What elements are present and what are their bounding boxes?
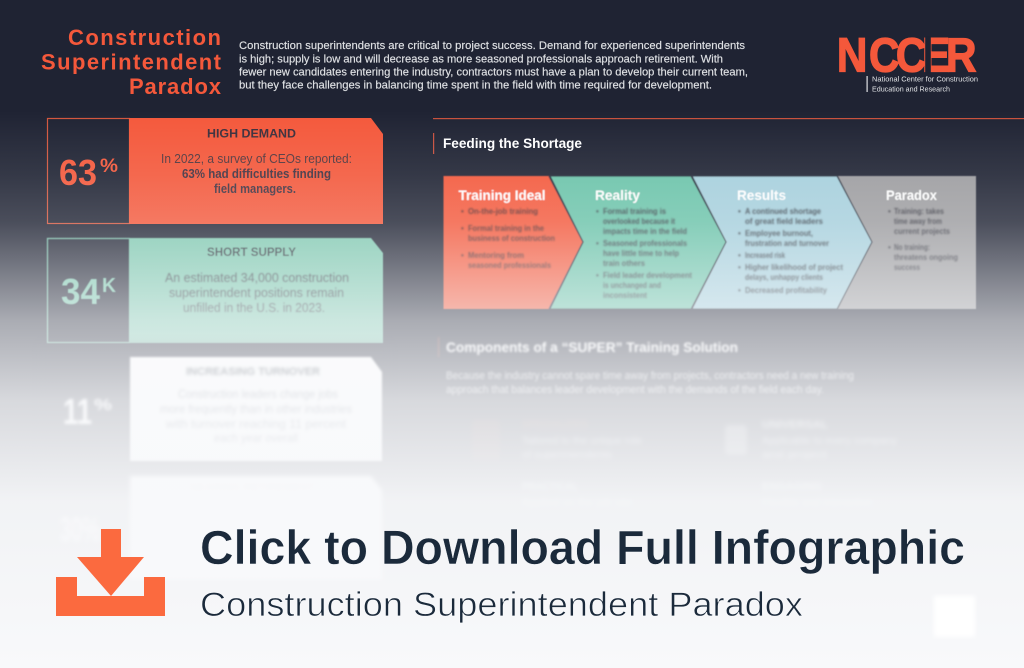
title: Superintendent: [41, 50, 222, 74]
intro text: fewer new candidates entering the industry, contractors must have a plan to develop their current team,: [239, 66, 748, 78]
solution items (faded): Tailored to the unique role: [522, 436, 642, 447]
title: [41, 25, 222, 99]
panel: retirement: NEARING RETIREMENT: [190, 482, 315, 494]
panel: high demand: 63% had difficulties finding: [182, 167, 331, 181]
section: components of a SUPER training solution: [438, 337, 854, 396]
faded footer square: [934, 596, 975, 637]
call to action subtitle: Construction Superintendent Paradox: [200, 586, 803, 624]
chevron: training ideal: Training Ideal: [458, 187, 546, 203]
chevron: results: Decreased profitability: [745, 286, 828, 295]
chevron: reality: [550, 176, 726, 309]
panel: retirement: [60, 476, 382, 580]
panel: increasing turnover: more frequently than in other industries: [160, 402, 352, 416]
panel: high demand: HIGH DEMAND: [207, 126, 296, 140]
solution items (faded): of superintendents: [522, 450, 612, 461]
chevron: training ideal: On-the-job training: [468, 207, 538, 216]
intro text: [239, 40, 748, 92]
chevron: results: Results: [737, 187, 786, 203]
chevron: paradox: time away from: [894, 217, 942, 226]
chevron: training ideal: Mentoring from: [468, 251, 524, 260]
chevron: training ideal: [444, 176, 583, 309]
chevron: training ideal: •: [461, 224, 464, 233]
solution items (faded): Flexible and interactive: [762, 498, 872, 509]
logo: NCCER: Education and Research: [872, 84, 950, 94]
solution items (faded): SPECIALIZED: [522, 419, 588, 431]
chevron: paradox: No training:: [894, 243, 930, 252]
panel: increasing turnover: each year overall: [214, 431, 298, 445]
chevron: reality: Formal training is: [603, 207, 667, 216]
panel: short supply: unfilled in the U.S. in 2023.: [183, 301, 325, 315]
chevron flow chart: [444, 176, 976, 309]
chevron: reality: overlooked because it: [603, 217, 675, 226]
chevron: paradox: [838, 176, 976, 309]
logo: NCCER: National Center for Construction: [872, 74, 978, 84]
chevron: paradox: •: [888, 207, 891, 216]
panel: increasing turnover: Construction leaders change jobs: [178, 387, 338, 401]
chevron: reality: Field leader development: [603, 271, 692, 280]
panel: increasing turnover: INCREASING TURNOVER: [186, 366, 320, 378]
title: Construction: [68, 25, 221, 50]
panel: short supply: superintendent positions remain: [169, 286, 344, 300]
chevron: results: delays, unhappy clients: [745, 273, 823, 282]
chevron: paradox: Training: takes: [894, 207, 944, 216]
panel: increasing turnover: %: [94, 397, 112, 414]
panel: increasing turnover: [63, 357, 382, 461]
chevron: training ideal: •: [461, 251, 464, 260]
chevron: training ideal: Formal training in the: [468, 224, 545, 233]
chevron: reality: is unchanged and: [603, 281, 661, 290]
panel: increasing turnover: with turnover reaching 11 percent: [165, 417, 347, 431]
chevron: reality: inconsistent: [603, 291, 647, 300]
panel: high demand: %: [100, 156, 118, 177]
panel: short supply: 34: [61, 271, 100, 312]
chevron: results: A continued shortage: [745, 207, 822, 216]
chevron: results: of great field leaders: [745, 217, 824, 226]
chevron: reality: •: [596, 239, 599, 248]
chevron: reality: have little time to help: [603, 249, 679, 258]
solution items (faded): ENGAGING: [762, 481, 822, 493]
chevron: reality: impacts time in the field: [603, 227, 687, 236]
chevron: reality: train others: [603, 259, 646, 268]
panel: short supply: [48, 238, 383, 343]
solution items (faded): UNIVERSAL: [762, 419, 828, 431]
logo: NCCER: NCCER: [837, 28, 977, 82]
call to action heading: Click to Download Full Infographic: [200, 522, 965, 575]
intro text: Construction superintendents are critical to project success. Demand for experienced superintendents: [239, 40, 746, 52]
chevron: reality: Seasoned professionals: [603, 239, 688, 248]
intro text: but they face challenges in balancing time spent in the field with time required for development.: [239, 80, 712, 92]
section: components of a SUPER training solution: approach that balances leader development with the demands of the field each day.: [446, 384, 824, 396]
intro text: is high; supply is low and will decrease as more seasoned professionals approach retirement. With: [239, 54, 723, 66]
panel: increasing turnover: 11: [63, 391, 92, 432]
chevron: results: •: [738, 263, 741, 272]
chevron: reality: •: [596, 271, 599, 280]
solution items (faded): [472, 419, 897, 509]
chevron: results: •: [738, 229, 741, 238]
solution items (faded): Applied on the job site: [522, 498, 632, 509]
chevron: results: •: [738, 251, 741, 260]
heading: feeding the shortage: Feeding the Shortage: [443, 135, 582, 151]
chevron: results: •: [738, 207, 741, 216]
chevron: training ideal: business of construction: [468, 234, 555, 243]
icon: download arrow: [56, 529, 165, 616]
chevron: paradox: success: [894, 263, 920, 272]
panel: high demand: [48, 118, 383, 224]
chevron: reality: •: [596, 207, 599, 216]
chevron: results: •: [738, 286, 741, 295]
chevron: paradox: current projects: [894, 227, 951, 236]
divider line: right column: [433, 118, 1024, 119]
soft shadow behind lower panels: [42, 344, 388, 472]
chevron: results: [692, 176, 872, 309]
solution items (faded): Applicable to every company: [762, 436, 897, 447]
chevron: reality: Reality: [595, 187, 640, 203]
panel: retirement: 30%: [60, 511, 100, 549]
chevron: paradox: Paradox: [886, 187, 937, 203]
chevron: results: Higher likelihood of project: [745, 263, 843, 272]
solution items (faded): and project: [762, 450, 827, 461]
chevron: results: Increased risk: [745, 251, 785, 260]
chevron: results: frustration and turnover: [745, 239, 829, 248]
panel: high demand: field managers.: [214, 182, 296, 196]
solution items (faded): PRACTICAL: [522, 481, 578, 493]
section: components of a SUPER training solution: Components of a “SUPER” Training Solution: [446, 340, 738, 355]
chevron: paradox: threatens ongoing: [894, 253, 958, 262]
chevron: training ideal: seasoned professionals: [468, 261, 551, 270]
section: components of a SUPER training solution: Because the industry cannot spare time away from projects, contractors need a new training: [446, 370, 854, 382]
panel: short supply: An estimated 34,000 construction: [165, 271, 349, 285]
chevron: paradox: •: [888, 243, 891, 252]
title: Paradox: [129, 74, 222, 99]
panel: high demand: In 2022, a survey of CEOs reported:: [161, 152, 352, 166]
panel: high demand: 63: [59, 152, 97, 193]
panel: short supply: SHORT SUPPLY: [207, 245, 296, 259]
chevron: results: Employee burnout,: [745, 229, 813, 238]
chevron: training ideal: •: [461, 207, 464, 216]
panel: short supply: K: [102, 275, 117, 297]
